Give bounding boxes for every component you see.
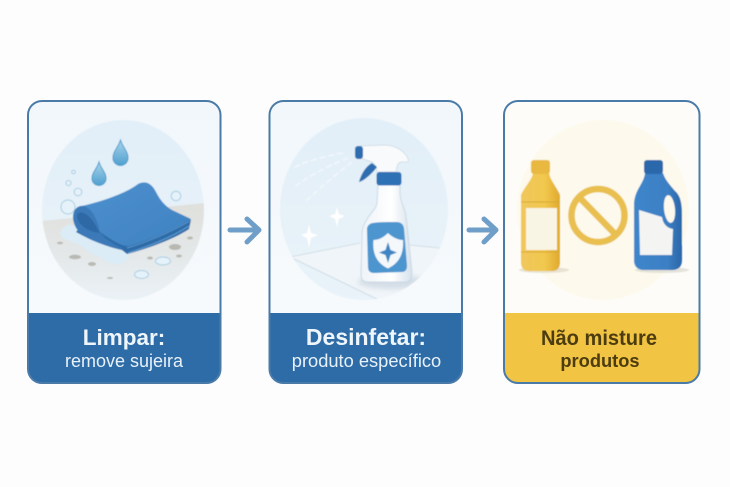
nozzle bbox=[355, 146, 363, 159]
arrow: desinfetar to não misture bbox=[469, 219, 496, 242]
spray head bbox=[360, 145, 408, 172]
illustration: spray bottle bbox=[280, 118, 450, 302]
shield icon bbox=[373, 233, 403, 268]
trigger bbox=[359, 163, 377, 182]
heading: desinfetar: Desinfetar: bbox=[306, 324, 426, 350]
bottle collar bbox=[376, 172, 402, 186]
panel: não misture bbox=[504, 101, 700, 383]
spray mist bbox=[293, 153, 352, 202]
prohibition sign bbox=[572, 189, 624, 242]
bottle label bbox=[367, 222, 407, 273]
panel: limpar bbox=[28, 101, 221, 383]
caption band bbox=[504, 313, 700, 383]
caption band bbox=[269, 313, 463, 383]
sparkles bbox=[301, 207, 345, 248]
water puddle bbox=[60, 225, 130, 265]
yellow bottle bbox=[519, 160, 569, 273]
text: produtos: produtos bbox=[560, 350, 640, 371]
illustration: do not mix bottles bbox=[517, 120, 689, 300]
panel: desinfetar bbox=[269, 101, 463, 383]
heading: não misture: Não misture bbox=[541, 327, 657, 350]
arrow: limpar to desinfetar bbox=[230, 219, 259, 242]
bottle body bbox=[361, 185, 412, 282]
text: remove sujeira: remove sujeira bbox=[65, 351, 184, 371]
cloth bbox=[73, 182, 191, 254]
caption band bbox=[28, 313, 221, 383]
water drops bbox=[113, 140, 128, 166]
text: produto específico: produto específico bbox=[292, 350, 441, 371]
blue bottle bbox=[634, 160, 689, 273]
water bubbles bbox=[61, 170, 181, 278]
heading: limpar: Limpar: bbox=[83, 325, 165, 350]
illustration: wet cloth on dirty surface bbox=[40, 120, 206, 302]
